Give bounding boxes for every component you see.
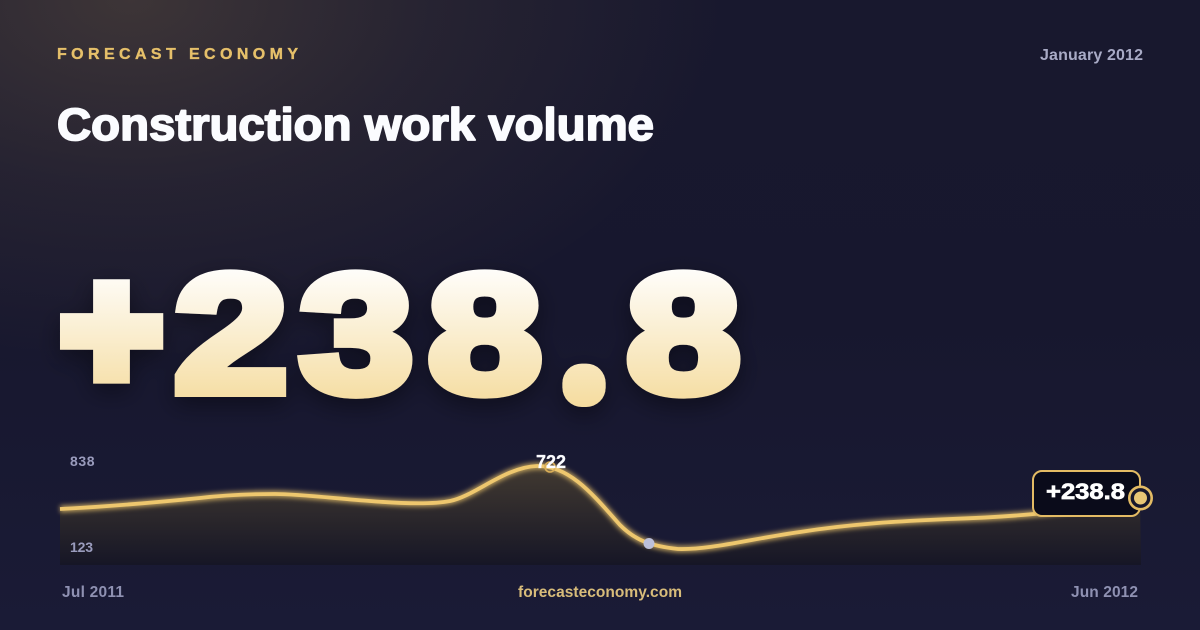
axis min label: 123 bbox=[70, 539, 93, 555]
end date: Jun 2012 bbox=[1071, 584, 1138, 601]
big number: 2 bbox=[174, 241, 288, 427]
end marker bbox=[1129, 487, 1152, 509]
line glow bbox=[60, 466, 1140, 549]
start date: Jul 2011 bbox=[62, 584, 124, 601]
big number: 8 bbox=[627, 241, 740, 427]
area under line bbox=[60, 466, 1141, 565]
line chart bbox=[60, 452, 1141, 565]
peak label: 722 bbox=[536, 452, 566, 472]
big number bbox=[62, 235, 740, 427]
big number: 3 bbox=[300, 241, 413, 427]
date: January 2012 bbox=[1040, 47, 1143, 64]
big number: + bbox=[62, 235, 161, 425]
brand label: FORECAST ECONOMY bbox=[57, 46, 298, 63]
website: forecasteconomy.com bbox=[518, 584, 682, 601]
latest value callout bbox=[1033, 471, 1140, 516]
latest value callout: +238.8 bbox=[1046, 479, 1125, 504]
title: Construction work volume bbox=[57, 99, 654, 150]
big number: 8 bbox=[428, 241, 542, 427]
big number: . bbox=[580, 362, 588, 394]
low point marker bbox=[644, 538, 654, 549]
peak marker bbox=[545, 462, 555, 472]
axis max label: 838 bbox=[70, 453, 95, 469]
trend line bbox=[60, 466, 1140, 549]
